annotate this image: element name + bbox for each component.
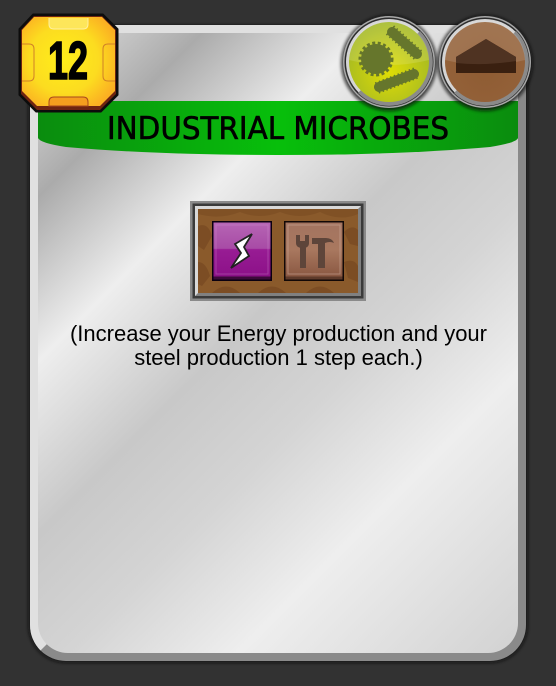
description text: steel production 1 step each.) <box>134 345 423 370</box>
icon: energy production <box>212 221 272 281</box>
cost badge <box>19 14 118 112</box>
title banner <box>38 101 518 155</box>
icon: steel production <box>284 221 344 281</box>
description text: (Increase your Energy production and your <box>70 321 487 346</box>
tag: building <box>437 15 533 111</box>
icon: building <box>456 39 516 73</box>
tag: microbe <box>341 15 437 111</box>
production box <box>190 201 366 301</box>
cost number: 12 <box>48 31 88 91</box>
title: INDUSTRIAL MICROBES <box>107 111 449 147</box>
icon: microbes <box>360 30 419 88</box>
